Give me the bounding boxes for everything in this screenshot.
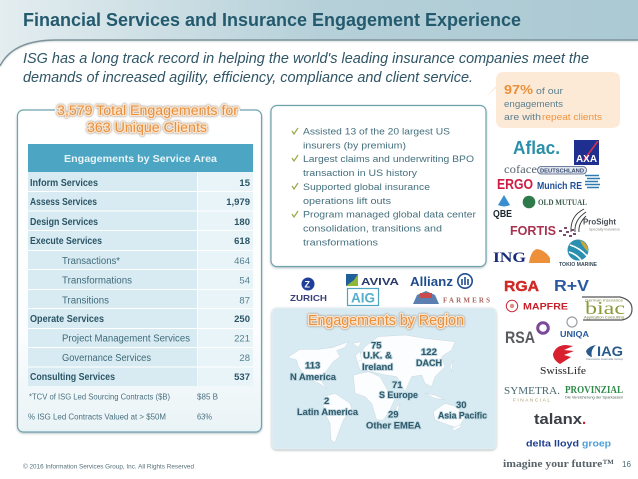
logo: QBE: QBE (493, 208, 512, 220)
logo: Talanx: talanx (534, 411, 583, 428)
logo: Symetra: FINANCIAL (513, 398, 550, 404)
region labels: 122 (421, 347, 437, 358)
logo: Mapfre (506, 300, 568, 312)
logo: BIAC: German Insurance (585, 298, 623, 302)
region labels: 113 (305, 361, 320, 372)
region labels: 29 (388, 410, 399, 421)
table: engagements by service area: Assess Services (30, 197, 97, 208)
logo: BIAC (582, 297, 632, 320)
region labels: Other EMEA (366, 421, 421, 432)
logo: AXA (574, 140, 599, 165)
panel: achievements (271, 106, 486, 266)
logo: Old Mutual (523, 196, 587, 208)
bullet list: Supported global insurance (303, 182, 430, 193)
tagline: imagine your future™ (503, 458, 614, 470)
bullet list: transaction in US history (303, 168, 417, 179)
header band (0, 0, 638, 66)
table: engagements by service area: 221 (234, 334, 250, 344)
logo: Delta Lloyd (526, 438, 611, 450)
table: engagements by service area: 180 (234, 217, 250, 228)
world map (288, 335, 465, 443)
table: engagements by service area: Consulting Services (30, 372, 115, 383)
logo: R+V: R+V (554, 278, 589, 295)
logo: Zurich: ZURICH (290, 293, 327, 303)
logo: Uniqa (560, 317, 589, 339)
callout: repeat clients (485, 72, 620, 128)
logo: Old Mutual: OLD MUTUAL (538, 198, 587, 207)
bullet list: Program managed global data center (303, 210, 477, 220)
logo: ING (493, 249, 550, 266)
callout: repeat clients: repeat clients (542, 112, 603, 122)
panel heading (57, 103, 239, 135)
logo: Uniqa: UNIQA (560, 330, 589, 339)
logo: AXA: AXA (576, 153, 597, 165)
logo: Aflac: Aflac. (513, 138, 560, 158)
table: engagements by service area: Operate Services (30, 314, 104, 325)
table: engagements by service area: 618 (234, 236, 250, 247)
logo: Swiss Life (540, 345, 586, 377)
table: engagements by service area: Engagements by Service Area (64, 153, 217, 165)
table: engagements by service area: 537 (234, 372, 250, 383)
logo: Talanx: . (582, 411, 586, 428)
table footnotes (28, 392, 218, 422)
region labels: 75 (371, 341, 382, 352)
callout: repeat clients: are with (504, 112, 541, 122)
logo: Provinzial: Die Versicherung der Sparkassen (565, 396, 623, 400)
region labels: U.K. & (363, 351, 392, 362)
logo: RSA: RSA (505, 329, 535, 347)
title: Financial Services and Insurance Engagement Experience (23, 10, 521, 30)
logo: Swiss Life: SwissLife (540, 366, 586, 377)
callout: repeat clients: engagements (504, 99, 564, 109)
intro text: demands of increased agility, efficiency, compliance and client service. (23, 70, 473, 86)
page number: 16 (622, 459, 631, 469)
logo: Fortis: FORTIS (510, 224, 556, 238)
region labels: N America (290, 372, 337, 383)
logo: Provinzial (565, 385, 623, 400)
table: engagements by service area: 15 (239, 178, 251, 189)
table: engagements by service area: Transformations (62, 276, 132, 286)
checkmark bullets (292, 128, 298, 217)
table: engagements by service area: Transitions (62, 296, 109, 306)
logo: ING: ING (493, 250, 526, 266)
logo: Aviva (346, 274, 399, 288)
logo: RSA (505, 323, 548, 347)
table: engagements by service area: 1,979 (226, 197, 250, 208)
logo: Allianz: Allianz (410, 274, 454, 289)
bullet list: Largest claims and underwriting BPO (303, 154, 474, 165)
logo: Farmers (413, 291, 490, 304)
table: engagements by service area: Project Management Services (62, 334, 190, 344)
bullet list: transformations (303, 238, 378, 248)
logo: Farmers: FARMERS (443, 296, 490, 304)
logo: RGA: RGA (504, 279, 540, 295)
table: engagements by service area (28, 144, 253, 386)
region labels: 71 (392, 380, 403, 391)
logo: Coface (504, 164, 586, 176)
table footnotes: $85 B (197, 392, 218, 402)
bullet list: operations lift outs (303, 196, 391, 207)
copyright footer: © 2016 Information Services Group, Inc. All Rights Reserved (23, 464, 195, 470)
logo: ProSight: Specialty Insurance (589, 228, 620, 232)
logo: IAG (586, 343, 623, 361)
intro text: ISG has a long track record in helping the world's leading insurance companies meet the (23, 51, 589, 67)
bullet list: Assisted 13 of the 20 largest US (303, 126, 450, 138)
logo: Coface: coface (504, 164, 537, 176)
table: engagements by service area: Transactions* (62, 256, 120, 267)
logo: QBE (493, 195, 512, 220)
table: engagements by service area: 464 (234, 256, 250, 267)
region labels: S Europe (379, 390, 418, 401)
logo: AIG: AIG (351, 290, 375, 306)
logo: ProSight (571, 209, 620, 232)
callout: repeat clients: 97% (504, 82, 533, 97)
logo: IAG: IAG (597, 343, 623, 359)
logo: Coface: DEUTSCHLAND (540, 169, 584, 175)
logo: BIAC: Application Consulting (584, 316, 624, 320)
table footnotes: *TCV of ISG Led Sourcing Contracts ($B) (29, 392, 170, 402)
logo: Provinzial: PROVINZIAL (565, 385, 623, 396)
table: engagements by service area: 28 (239, 353, 250, 364)
table: engagements by service area: Execute Services (30, 236, 102, 247)
logo: Tokio Marine (559, 240, 597, 268)
table: engagements by service area: Governance Services (62, 353, 151, 364)
logo: Allianz (410, 274, 472, 289)
logo: Zurich: Z (304, 280, 310, 290)
table: engagements by service area: 250 (234, 314, 250, 325)
logo: Delta Lloyd: delta lloyd (526, 438, 579, 450)
region labels (290, 341, 487, 432)
logo: Mapfre: MAPFRE (523, 302, 568, 312)
bullet list (303, 126, 477, 248)
table: engagements by service area: Inform Services (30, 178, 98, 189)
logo: Zurich (290, 278, 327, 303)
logo: Fortis (510, 224, 576, 238)
panel: total engagements (18, 103, 262, 432)
table footnotes: 63% (197, 412, 212, 422)
logo: Munich RE (537, 176, 600, 192)
table footnotes: % ISG Led Contracts Valued at > $50M (28, 412, 166, 422)
region labels: Latin America (297, 407, 359, 418)
panel heading: Engagements by Region (308, 313, 464, 329)
table: engagements by service area: Design Services (30, 217, 98, 228)
bullet list: consolidation, transitions and (303, 224, 442, 234)
region labels: Asia Pacific (438, 411, 487, 422)
logo: IAG: Insurance Australia Group (586, 357, 623, 361)
logo: Delta Lloyd: groep (582, 438, 611, 450)
logo: BIAC: biac (585, 298, 625, 318)
panel heading: 3,579 Total Engagements for (57, 103, 239, 118)
bullet list: insurers (by premium) (303, 140, 406, 152)
logo: Symetra (504, 385, 560, 404)
region labels: Ireland (362, 362, 393, 373)
logo: Aviva: AVIVA (361, 277, 399, 288)
table: engagements by service area: 54 (239, 276, 250, 286)
intro text (23, 51, 589, 86)
panel: engagements by region (272, 308, 496, 449)
logo: Tokio Marine: TOKIO MARINE (559, 262, 597, 268)
region labels: DACH (416, 358, 442, 369)
logo: ProSight: ProSight (583, 216, 616, 226)
table: engagements by service area: 87 (239, 296, 250, 306)
region labels: 30 (456, 400, 467, 411)
panel heading: 363 Unique Clients (87, 120, 207, 135)
logo: Ergo: ERGO (497, 177, 533, 193)
callout: repeat clients: of our (536, 86, 563, 96)
logo: Symetra: SYMETRA. (504, 385, 560, 397)
logo: Munich RE: Munich RE (537, 180, 582, 192)
region labels: 2 (324, 396, 329, 407)
